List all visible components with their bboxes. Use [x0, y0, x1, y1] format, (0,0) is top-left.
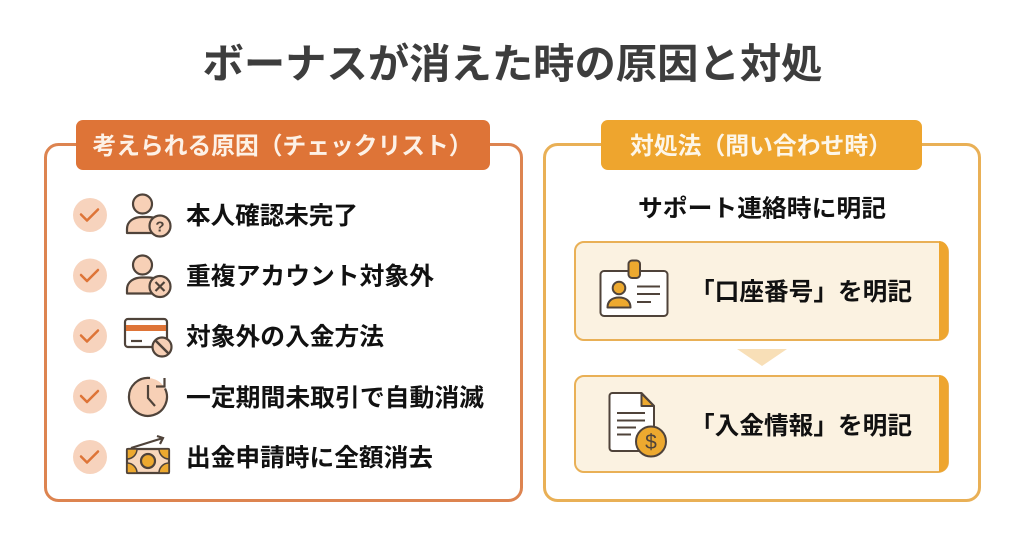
heading: causes: 考えられる原因（チェックリスト）	[92, 133, 472, 160]
label: account number: 「口座番号」を明記	[690, 278, 912, 306]
check icon 1	[73, 198, 107, 232]
icon: id badge	[600, 260, 668, 316]
icon: person with question mark	[127, 194, 170, 236]
card: account number	[575, 241, 948, 340]
icon: banknote with arrow	[127, 436, 169, 473]
icon: document with dollar coin: $	[645, 431, 657, 454]
icon: card with prohibited sign	[125, 319, 172, 356]
label: auto expiry: 一定期間未取引で自動消滅	[186, 384, 485, 412]
check icon 2	[73, 258, 107, 292]
panel: remedy	[544, 120, 980, 500]
icon: clock with arrow	[129, 378, 167, 416]
card: deposit information	[575, 375, 948, 472]
title: ボーナスが消えた時の原因と対処	[202, 41, 822, 87]
arrow: down	[737, 349, 787, 366]
panel: causes	[46, 120, 522, 500]
heading: causes	[76, 120, 490, 170]
panel frame: remedy	[544, 144, 980, 500]
label: identity verification: 本人確認未完了	[186, 202, 358, 230]
label: deposit information: 「入金情報」を明記	[690, 412, 912, 440]
subheading: サポート連絡時に明記	[638, 196, 886, 222]
heading: remedy: 対処法（問い合わせ時）	[630, 133, 892, 160]
label: duplicate account: 重複アカウント対象外	[186, 262, 435, 290]
label: full forfeiture on withdrawal: 出金申請時に全額消去	[186, 444, 433, 472]
check icon 3	[73, 319, 107, 353]
label: excluded deposit method: 対象外の入金方法	[186, 323, 385, 351]
check icon 4	[73, 380, 107, 414]
panel frame: causes	[46, 144, 522, 500]
heading: remedy	[601, 120, 922, 170]
check icon 5	[73, 440, 107, 474]
icon: person with cross	[127, 256, 170, 297]
icon: document with dollar coin	[610, 393, 666, 456]
icon: person with question mark: ?	[155, 218, 165, 236]
